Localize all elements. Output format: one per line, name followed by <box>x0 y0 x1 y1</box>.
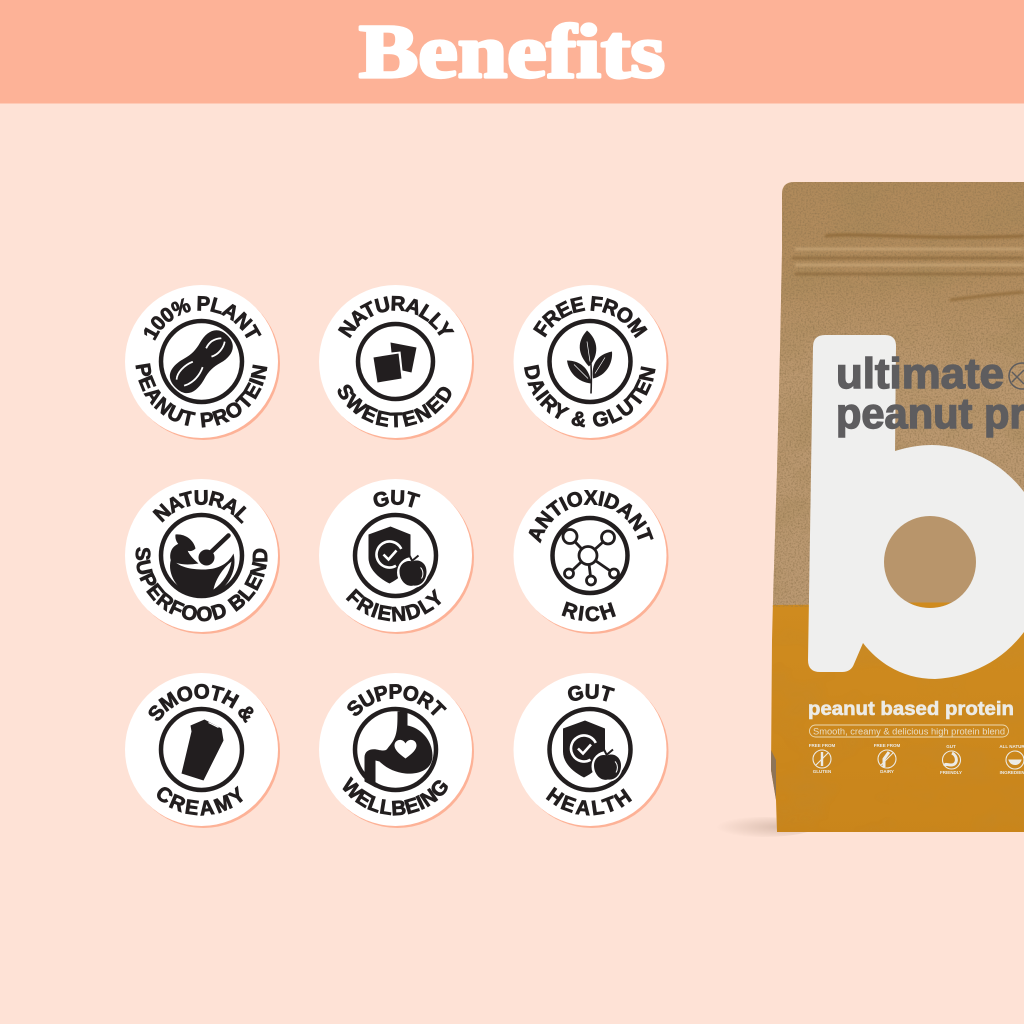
badge: smooth and creamy <box>125 673 280 828</box>
badge: support wellbeing: SUPPORT <box>347 684 447 716</box>
bag mini icons <box>809 743 1024 775</box>
bag mini icons: DAIRY <box>880 769 894 774</box>
badge: support wellbeing <box>319 673 474 828</box>
icon: leaves <box>567 330 612 394</box>
icon: shaker bottle <box>182 720 224 780</box>
bag mini icons: FRIENDLY <box>940 770 962 775</box>
icon: stomach with heart <box>364 712 432 788</box>
badge: 100% plant peanut protein: 100% PLANT <box>144 296 262 341</box>
badge: free from dairy and gluten <box>514 285 668 440</box>
icon: sugar cubes <box>374 342 416 382</box>
badge: antioxidant rich <box>514 479 668 634</box>
bag mini icons: FREE FROM <box>809 743 836 748</box>
badge: 100% plant peanut protein <box>125 285 280 440</box>
bag brand name <box>836 350 1024 438</box>
badge: natural superfood blend <box>125 479 280 634</box>
badge: 100% plant peanut protein: PEANUT PROTEIN <box>135 363 268 428</box>
badge: antioxidant rich: RICH <box>562 601 616 622</box>
badge: natural superfood blend: NATURAL <box>152 490 247 524</box>
icon: shield and apple <box>563 720 622 782</box>
badge: gut friendly: GUT <box>373 490 420 508</box>
badge: natural superfood blend: SUPERFOOD BLEND <box>135 547 268 622</box>
badge: antioxidant rich: ANTIOXIDANT <box>528 490 654 544</box>
badge: free from dairy and gluten: FREE FROM <box>532 296 648 338</box>
badge: support wellbeing: WELLBEING <box>342 776 448 816</box>
badge: free from dairy and gluten: DAIRY & GLUTEN <box>524 364 656 428</box>
bag mini icons: GUT <box>946 744 956 749</box>
header band with title: Benefits <box>359 10 665 94</box>
badge: gut health <box>514 673 668 828</box>
badge: gut health: GUT <box>568 684 615 702</box>
bag tagline <box>808 699 1014 737</box>
icon: peanut <box>164 324 239 399</box>
bag logo: white b <box>808 335 1024 679</box>
bag brand name: ultimate <box>836 350 1004 398</box>
badge: naturally sweetened: SWEETENED <box>338 384 452 428</box>
badge: smooth and creamy: CREAMY <box>157 786 243 816</box>
bag tagline: peanut based protein <box>808 699 1014 720</box>
badge: naturally sweetened <box>319 285 474 440</box>
badge: gut friendly <box>319 479 474 634</box>
bag mini icons: GLUTEN <box>813 769 831 774</box>
header band with title <box>0 0 1024 104</box>
badge: gut health: HEALTH <box>546 786 632 816</box>
badge: gut friendly: FRIENDLY <box>346 588 442 622</box>
badge: naturally sweetened: NATURALLY <box>338 296 454 338</box>
icon: superfood bowl <box>170 534 235 596</box>
bag peanut logo <box>1009 363 1024 389</box>
bag tagline: Smooth, creamy & delicious high protein blend <box>813 726 1005 736</box>
icon: shield and apple <box>368 526 428 588</box>
product bag <box>705 182 1024 840</box>
bag seal lines <box>792 235 1024 300</box>
icon: molecule <box>563 530 618 585</box>
badge: smooth and creamy: SMOOTH & <box>148 684 254 724</box>
bag mini icons: FREE FROM <box>874 743 901 748</box>
